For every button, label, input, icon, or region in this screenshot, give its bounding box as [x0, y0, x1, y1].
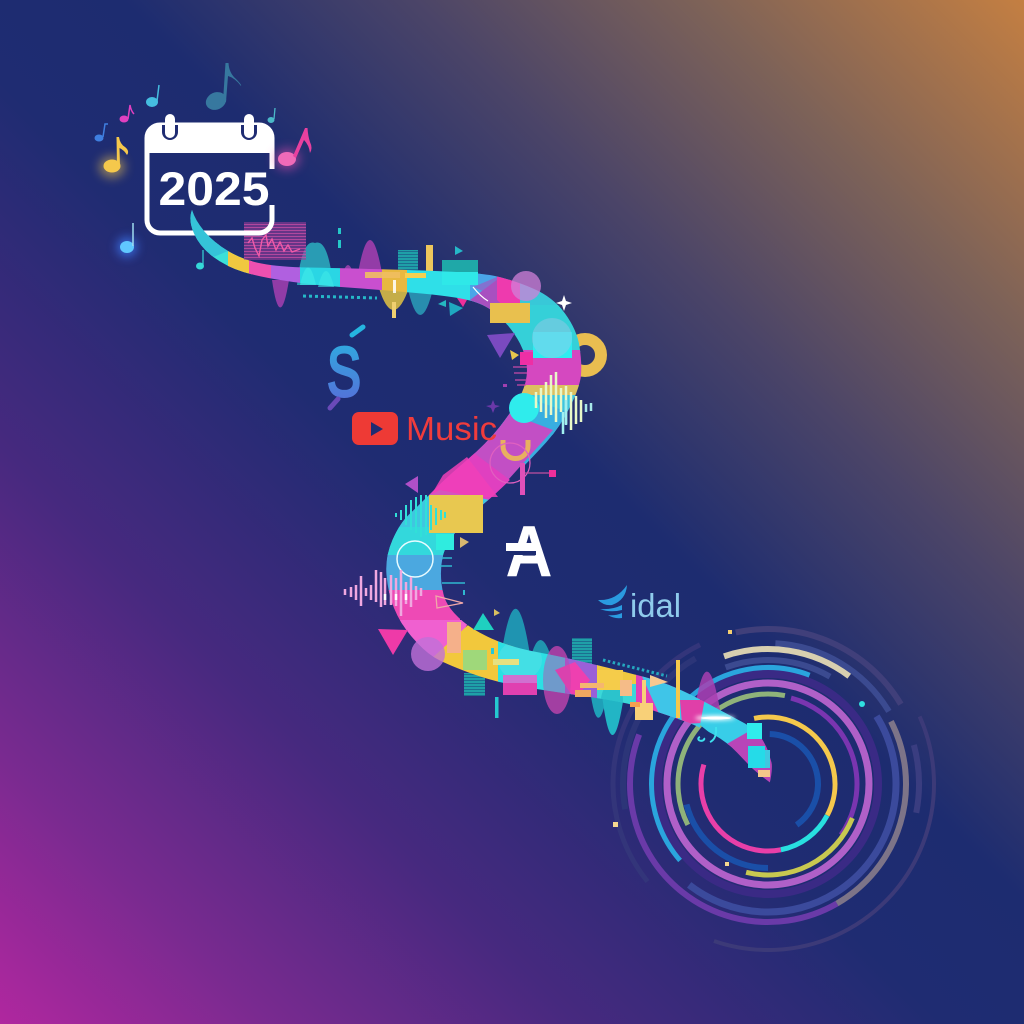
audio waveform: pink bars [345, 570, 421, 616]
logo: YouTube Music [352, 410, 497, 447]
shapes behind the ribbon [272, 228, 722, 735]
ribbon start overlapping calendar [190, 210, 228, 257]
note: pink large [274, 128, 312, 170]
note: pink [120, 105, 134, 122]
ribbon overlay shapes [300, 268, 770, 777]
logo: S platform: S [327, 333, 361, 411]
calendar icon 2025 [147, 114, 272, 233]
audio waveform: cyan bars [396, 495, 445, 537]
logo: Tidal [598, 585, 681, 624]
floating music notes [94, 63, 312, 270]
logo: Tidal: idal [630, 587, 681, 624]
note: blue [94, 124, 108, 142]
note: yellow [99, 137, 128, 178]
note: small teal [268, 108, 275, 123]
note: glowing blue [117, 223, 137, 257]
note: large teal [203, 63, 241, 113]
colourful flowing ribbon [180, 200, 780, 790]
logo: A platform: A [506, 512, 552, 592]
audio waveform: right bend [536, 372, 591, 434]
logo: YouTube Music: Music [406, 410, 497, 447]
concentric rings target [549, 565, 987, 1003]
note: small cyan [196, 250, 204, 270]
dotted accents [303, 296, 667, 676]
pink heartbeat panel [244, 222, 306, 260]
note: cyan [146, 85, 159, 107]
calendar icon 2025: 2025 [158, 162, 270, 215]
